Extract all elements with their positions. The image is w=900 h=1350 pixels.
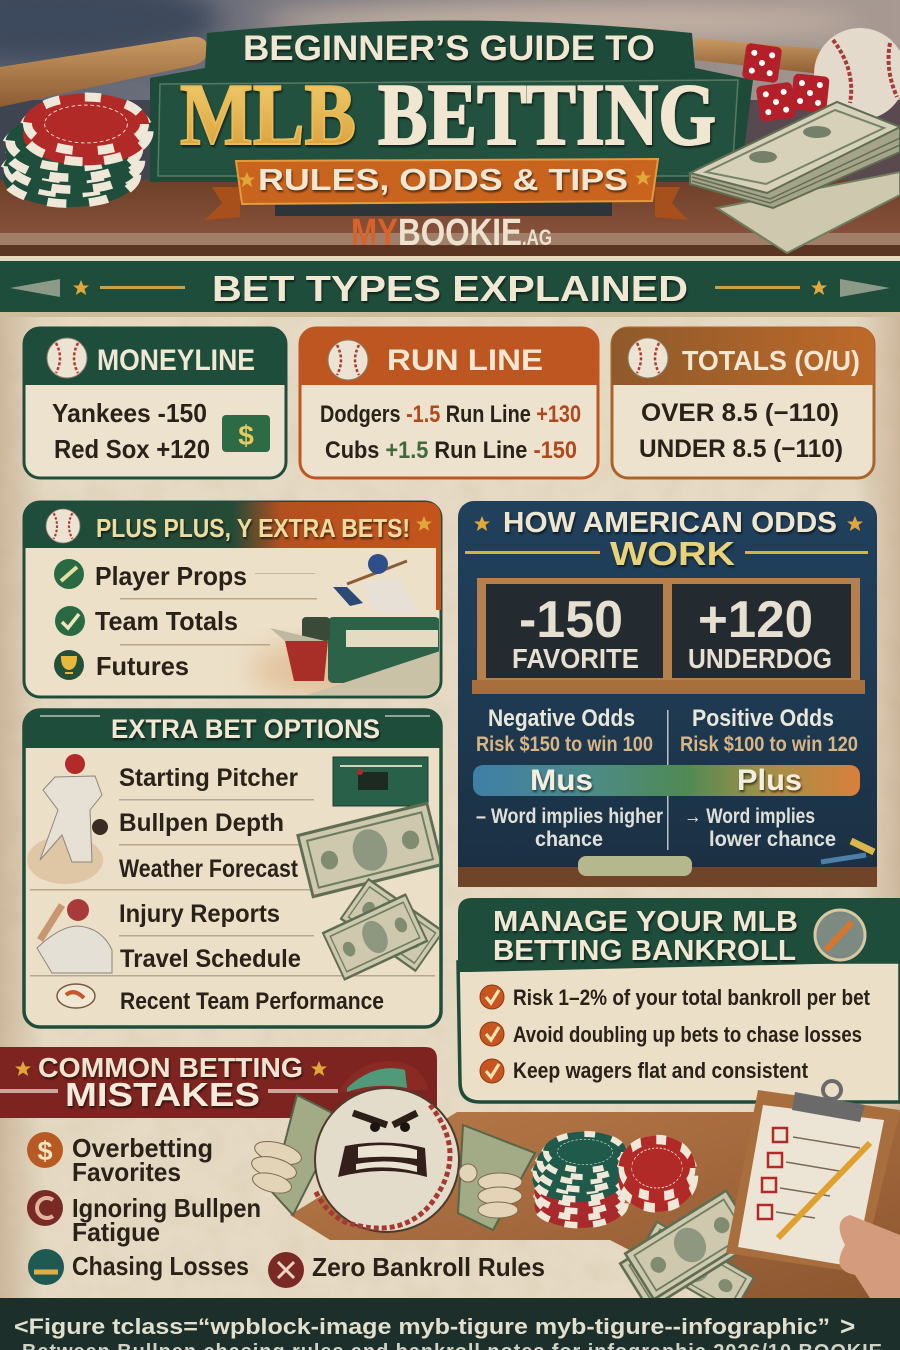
brand logo: MY	[351, 212, 398, 254]
scoreboard	[333, 757, 428, 806]
brand logo: BOOKIE	[398, 212, 522, 254]
panel: plus extra bets: Team Totals	[95, 606, 238, 636]
chalkboard: -150	[519, 591, 623, 649]
clipboard with pencil	[726, 1081, 900, 1273]
icon: player props	[54, 559, 84, 589]
cash bundle	[620, 1191, 755, 1314]
panel: manage bankroll: MANAGE YOUR MLB	[493, 906, 798, 938]
panel: manage bankroll	[458, 898, 900, 1102]
panel: american odds: chance	[535, 828, 603, 851]
panel: extra bet options: EXTRA BET OPTIONS	[111, 714, 380, 744]
icon: dollar	[222, 415, 270, 452]
title: MLB BETTING: MLB	[180, 67, 356, 164]
panel: totals: UNDER 8.5 (−110)	[639, 435, 843, 463]
angry baseball mascot	[249, 1061, 535, 1232]
chalk strip: Plus	[737, 764, 802, 797]
pitcher illustration	[27, 754, 108, 884]
band title: BET TYPES EXPLAINED	[212, 268, 688, 309]
panel: plus extra bets: PLUS PLUS, Y EXTRA BETS!	[96, 513, 410, 543]
mistakes list: Fatigue	[72, 1217, 160, 1247]
panel: extra bet options	[24, 710, 443, 1027]
panel: totals: TOTALS (O/U)	[682, 345, 860, 376]
panel: run line	[300, 328, 598, 478]
baseball	[814, 28, 900, 120]
cash stack	[690, 102, 900, 253]
footer	[0, 1298, 900, 1350]
panel: extra bet options: Travel Schedule	[120, 945, 301, 973]
icon: team totals	[55, 606, 85, 636]
icon: performance badge	[57, 984, 95, 1008]
panel: totals	[612, 328, 874, 478]
panel: extra bet options: Injury Reports	[119, 900, 280, 928]
panel: run line: Cubs +1.5 Run Line -150	[325, 437, 577, 464]
icon: chasing losses	[28, 1249, 64, 1285]
panel: run line: RUN LINE	[387, 344, 543, 377]
panel: plus extra bets	[24, 502, 450, 700]
bat right	[695, 38, 830, 75]
batter, bucket, scoreboard and cash illustration	[250, 554, 450, 700]
panel: common mistakes header	[0, 1047, 437, 1118]
mistakes list	[27, 1132, 545, 1288]
mistakes list: Zero Bankroll Rules	[312, 1252, 545, 1282]
panel: american odds: Negative Odds	[488, 705, 635, 732]
panel: manage bankroll: BETTING BANKROLL	[493, 935, 796, 967]
icon: dollar: $	[37, 1136, 53, 1166]
player illustration	[37, 899, 112, 973]
chalk strip	[473, 764, 860, 797]
panel: american odds: Risk $100 to win 120	[680, 733, 858, 756]
panel: extra bet options: Bullpen Depth	[119, 809, 284, 837]
wood table scene	[290, 1112, 900, 1298]
panel: american odds: lower chance	[709, 828, 836, 851]
icon: tools badge	[815, 910, 865, 960]
footer: >	[840, 1311, 855, 1341]
panel: plus extra bets: Futures	[96, 651, 189, 681]
icon: dollar	[27, 1132, 63, 1168]
title: MLB BETTING	[180, 67, 716, 164]
panel: american odds: HOW AMERICAN ODDS	[503, 507, 837, 539]
hand	[839, 1215, 900, 1298]
mistakes list: Favorites	[72, 1157, 181, 1187]
cash pile	[298, 803, 443, 979]
panel: common mistakes header: MISTAKES	[65, 1076, 260, 1113]
green title banner	[150, 20, 753, 182]
bet types band	[0, 261, 900, 317]
panel: american odds: Positive Odds	[692, 705, 834, 732]
title: MLB BETTING: BETTING	[378, 67, 716, 164]
panel: moneyline: Red Sox +120	[54, 434, 210, 464]
orange ribbon: RULES, ODDS & TIPS	[258, 162, 628, 197]
panel: moneyline: MONEYLINE	[97, 344, 255, 377]
mistakes list: Chasing Losses	[72, 1251, 249, 1281]
icon: bankroll rules	[268, 1252, 304, 1288]
header scene	[0, 0, 900, 261]
panel: american odds: → Word implies	[684, 805, 815, 828]
panel: american odds: WORK	[610, 535, 735, 572]
brand logo: .AG	[522, 225, 552, 250]
panel: moneyline	[24, 328, 286, 478]
chalkboard: FAVORITE	[512, 643, 639, 674]
mistakes list: Ignoring Bullpen	[72, 1193, 261, 1223]
icon: dollar: $	[238, 420, 254, 451]
chalkboard	[472, 578, 865, 694]
mistakes list: Overbetting	[72, 1133, 213, 1163]
panel: extra bet options: Weather Forecast	[119, 855, 299, 883]
panel: extra bet options: Recent Team Performance	[120, 988, 384, 1015]
panel: common mistakes header: COMMON BETTING	[38, 1052, 303, 1083]
bat left	[0, 37, 208, 107]
panel: american odds	[458, 501, 877, 887]
dice	[742, 43, 830, 122]
panel: american odds: Risk $150 to win 100	[476, 733, 653, 756]
panel: plus extra bets: Player Props	[95, 561, 247, 591]
panel: totals: OVER 8.5 (−110)	[641, 399, 839, 427]
chalk strip: Mus	[530, 764, 593, 797]
chalk tray	[458, 841, 877, 887]
orange ribbon	[205, 159, 688, 220]
icon: fatigue	[27, 1190, 63, 1226]
chips stacks	[532, 1132, 696, 1228]
panel: extra bet options: Starting Pitcher	[119, 764, 298, 792]
title: beginner's guide: BEGINNER’S GUIDE TO	[243, 29, 655, 68]
panel: moneyline: Yankees -150	[52, 398, 207, 428]
panel: american odds: – Word implies higher	[476, 805, 663, 828]
chalkboard: +120	[698, 591, 813, 649]
poker chips	[3, 93, 149, 207]
icon: futures trophy	[54, 650, 84, 680]
chalkboard: UNDERDOG	[688, 643, 832, 674]
panel: manage bankroll: Keep wagers flat and consistent	[513, 1058, 809, 1083]
panel: run line: Dodgers -1.5 Run Line +130	[320, 401, 581, 428]
footer: <Figure tclass=“wpblock-image myb-tigure myb-tigure--infographic”	[14, 1314, 830, 1339]
